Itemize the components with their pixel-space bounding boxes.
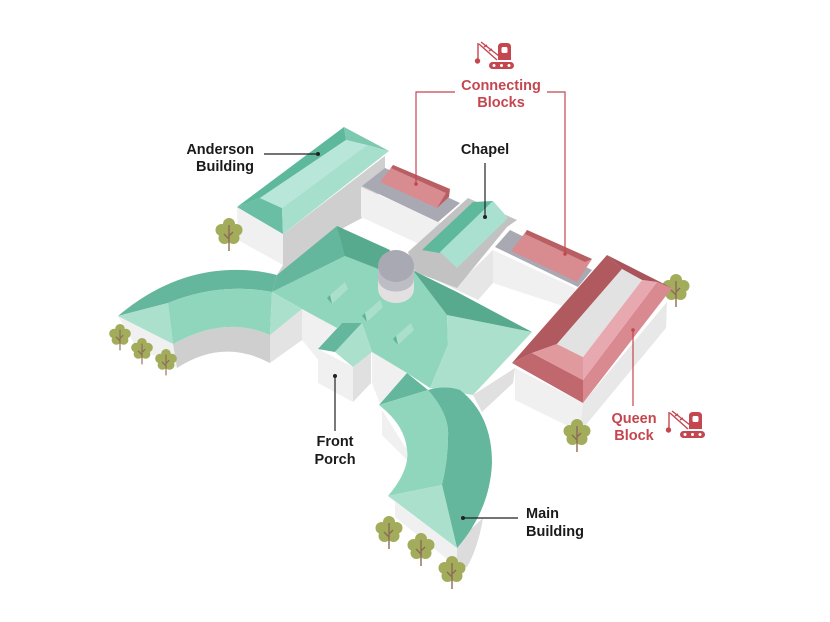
label: Connecting Blocks xyxy=(461,78,541,111)
leader: Queen Block xyxy=(631,328,635,406)
label: Queen Block: Block xyxy=(614,428,655,444)
leader: Connecting Blocks right xyxy=(547,92,567,256)
tree xyxy=(564,419,590,452)
tree xyxy=(131,338,153,364)
tree xyxy=(408,533,434,566)
roof: dormers xyxy=(327,282,414,345)
leader: Connecting Blocks left xyxy=(414,92,455,186)
tree xyxy=(216,218,242,251)
label: Anderson Building: Building xyxy=(196,159,254,175)
roof: south wing xyxy=(379,373,492,548)
label: Main Building: Main xyxy=(526,506,559,522)
icon: crane top xyxy=(475,42,514,69)
label: Anderson Building xyxy=(186,142,254,175)
tree xyxy=(376,516,402,549)
building: Front Porch xyxy=(318,323,372,402)
building: Chapel xyxy=(408,198,517,300)
label: Connecting Blocks: Blocks xyxy=(477,95,525,111)
building: Queen Block xyxy=(512,255,672,432)
roof: Main Building central xyxy=(272,226,532,395)
label: Main Building: Building xyxy=(526,524,584,540)
icon: crane Queen Block xyxy=(666,411,705,438)
label: Queen Block xyxy=(611,411,657,444)
label: Anderson Building: Anderson xyxy=(186,142,254,158)
label: Connecting Blocks: Connecting xyxy=(461,78,541,94)
label: Front Porch: Porch xyxy=(314,452,356,468)
leader: Anderson Building xyxy=(264,152,320,156)
tree xyxy=(438,556,466,589)
leader: Chapel xyxy=(483,163,487,219)
label: Front Porch: Front xyxy=(316,434,354,450)
tree xyxy=(155,349,177,375)
tree: behind Queen Block xyxy=(662,274,690,307)
building: Anderson Building xyxy=(237,127,389,275)
label: Chapel: Chapel xyxy=(461,142,509,158)
tower xyxy=(378,250,414,303)
building: west connecting block xyxy=(361,165,460,250)
roof: west wing xyxy=(118,270,302,344)
building: east connecting block xyxy=(493,230,592,310)
leader: Front Porch xyxy=(333,374,337,431)
tree xyxy=(109,324,131,350)
label: Queen Block: Queen xyxy=(611,411,657,427)
label: Main Building xyxy=(526,506,584,540)
label: Front Porch xyxy=(314,434,356,468)
building: Main Building walls xyxy=(118,309,515,567)
leader: Main Building xyxy=(461,516,518,520)
